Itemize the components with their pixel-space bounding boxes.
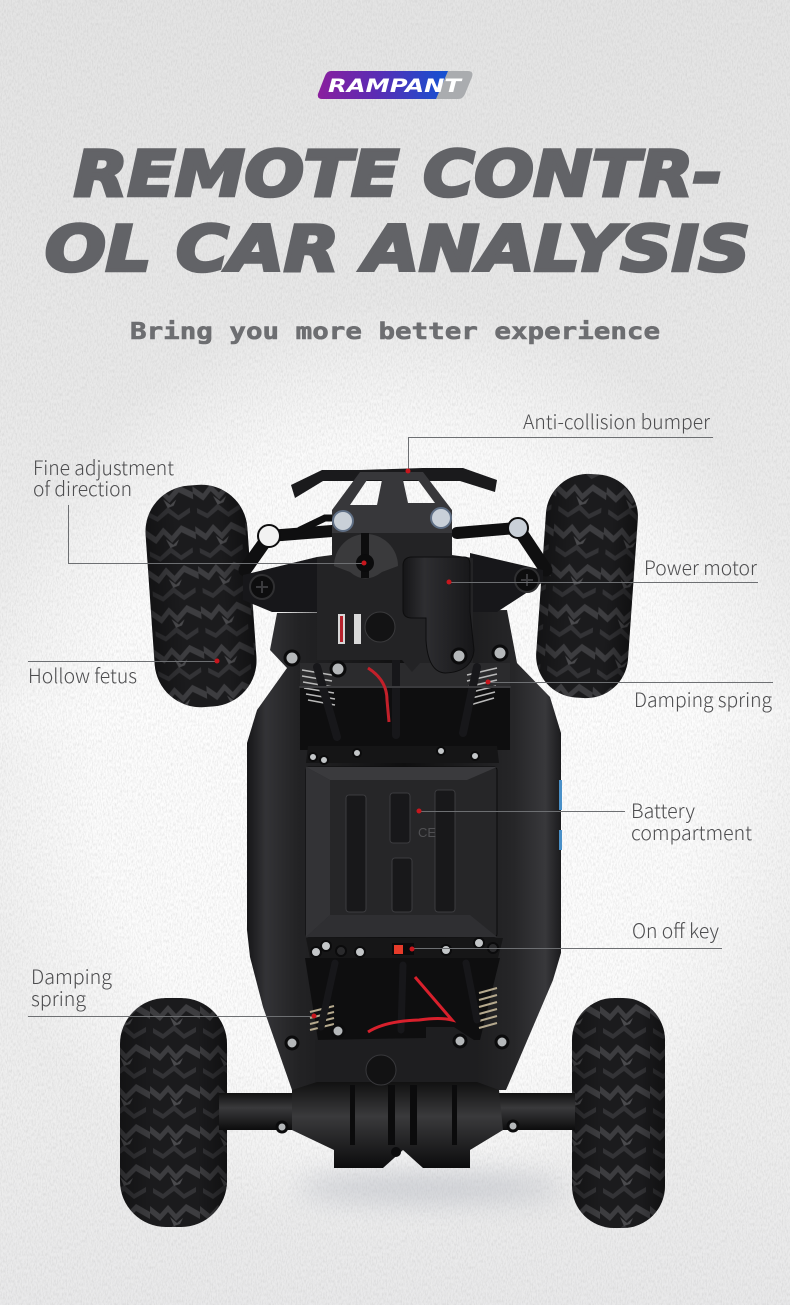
callout: fine adjustment of direction: of direction bbox=[33, 473, 132, 502]
battery tray top strip bbox=[306, 746, 499, 763]
rear gearbox bbox=[315, 1027, 477, 1083]
front knob bbox=[365, 612, 395, 642]
differential ribs bbox=[350, 1085, 457, 1157]
callout: power motor bbox=[446, 552, 758, 584]
ground shadow bbox=[295, 1172, 565, 1204]
front right tyre bbox=[533, 471, 641, 701]
lower chassis well bbox=[300, 687, 510, 1040]
callout: battery compartment bbox=[416, 795, 752, 846]
callout: hollow fetus bbox=[28, 658, 220, 689]
front links bbox=[300, 660, 510, 737]
motor housing bbox=[403, 557, 474, 673]
front bolts bbox=[258, 508, 528, 547]
battery tray bottom strip bbox=[306, 938, 503, 958]
title bbox=[45, 137, 750, 285]
bumper bar bbox=[291, 468, 497, 498]
callout: damping spring left: Damping bbox=[31, 961, 112, 990]
callout: fine adjustment of direction bbox=[33, 452, 366, 566]
steering dial bbox=[334, 532, 398, 578]
callout: anti-collision bumper: Anti-collision bumper bbox=[523, 406, 711, 435]
battery compartment cover bbox=[306, 767, 497, 937]
rear springs bbox=[310, 988, 497, 1030]
rear links bbox=[321, 963, 477, 1030]
title: OL CAR ANALYSIS bbox=[45, 212, 750, 285]
tray screws bbox=[309, 747, 498, 957]
rear screws bbox=[277, 1025, 518, 1132]
front chassis screws bbox=[285, 646, 507, 676]
callout: battery compartment: compartment bbox=[631, 817, 752, 846]
red wire rear bbox=[368, 977, 452, 1032]
callout: anti-collision bumper bbox=[406, 406, 713, 474]
callout: damping spring right: Damping spring bbox=[634, 684, 772, 713]
title: REMOTE CONTR- bbox=[74, 137, 722, 210]
car illustration bbox=[120, 468, 665, 1228]
rear left tyre bbox=[120, 998, 227, 1227]
front wings bbox=[243, 553, 543, 612]
front gearbox bbox=[317, 530, 473, 672]
red wire front bbox=[368, 668, 389, 722]
callout: damping spring right bbox=[486, 680, 773, 713]
rear differential housing bbox=[292, 1082, 503, 1168]
rear knob bbox=[366, 1055, 396, 1085]
logo: Rampant bbox=[318, 71, 472, 99]
front indicator lights bbox=[338, 614, 361, 644]
callout: battery compartment: Battery bbox=[631, 795, 695, 824]
callout: hollow fetus: Hollow fetus bbox=[28, 660, 137, 689]
rear axle bbox=[219, 1093, 575, 1130]
front springs bbox=[302, 668, 497, 705]
logo: Rampant: RAMPANT bbox=[328, 75, 464, 97]
car body shell bbox=[247, 610, 561, 1090]
callout: fine adjustment of direction: Fine adjustment bbox=[33, 452, 174, 481]
battery compartment cover: CE bbox=[418, 825, 436, 840]
callout: on off key bbox=[410, 915, 722, 952]
callout: damping spring left: spring bbox=[31, 983, 86, 1012]
callout: power motor: Power motor bbox=[644, 552, 758, 581]
callout: on off key: On off key bbox=[632, 915, 719, 944]
front left tyre bbox=[142, 482, 260, 710]
on off switch bbox=[392, 943, 414, 955]
bumper mount plate bbox=[332, 472, 452, 533]
callout: damping spring left bbox=[28, 961, 316, 1018]
steering links bbox=[245, 518, 546, 570]
subtitle: Bring you more better experience bbox=[130, 319, 660, 345]
rear right tyre bbox=[572, 998, 665, 1228]
blue decal edge bbox=[559, 780, 562, 850]
chassis well bbox=[300, 663, 510, 687]
